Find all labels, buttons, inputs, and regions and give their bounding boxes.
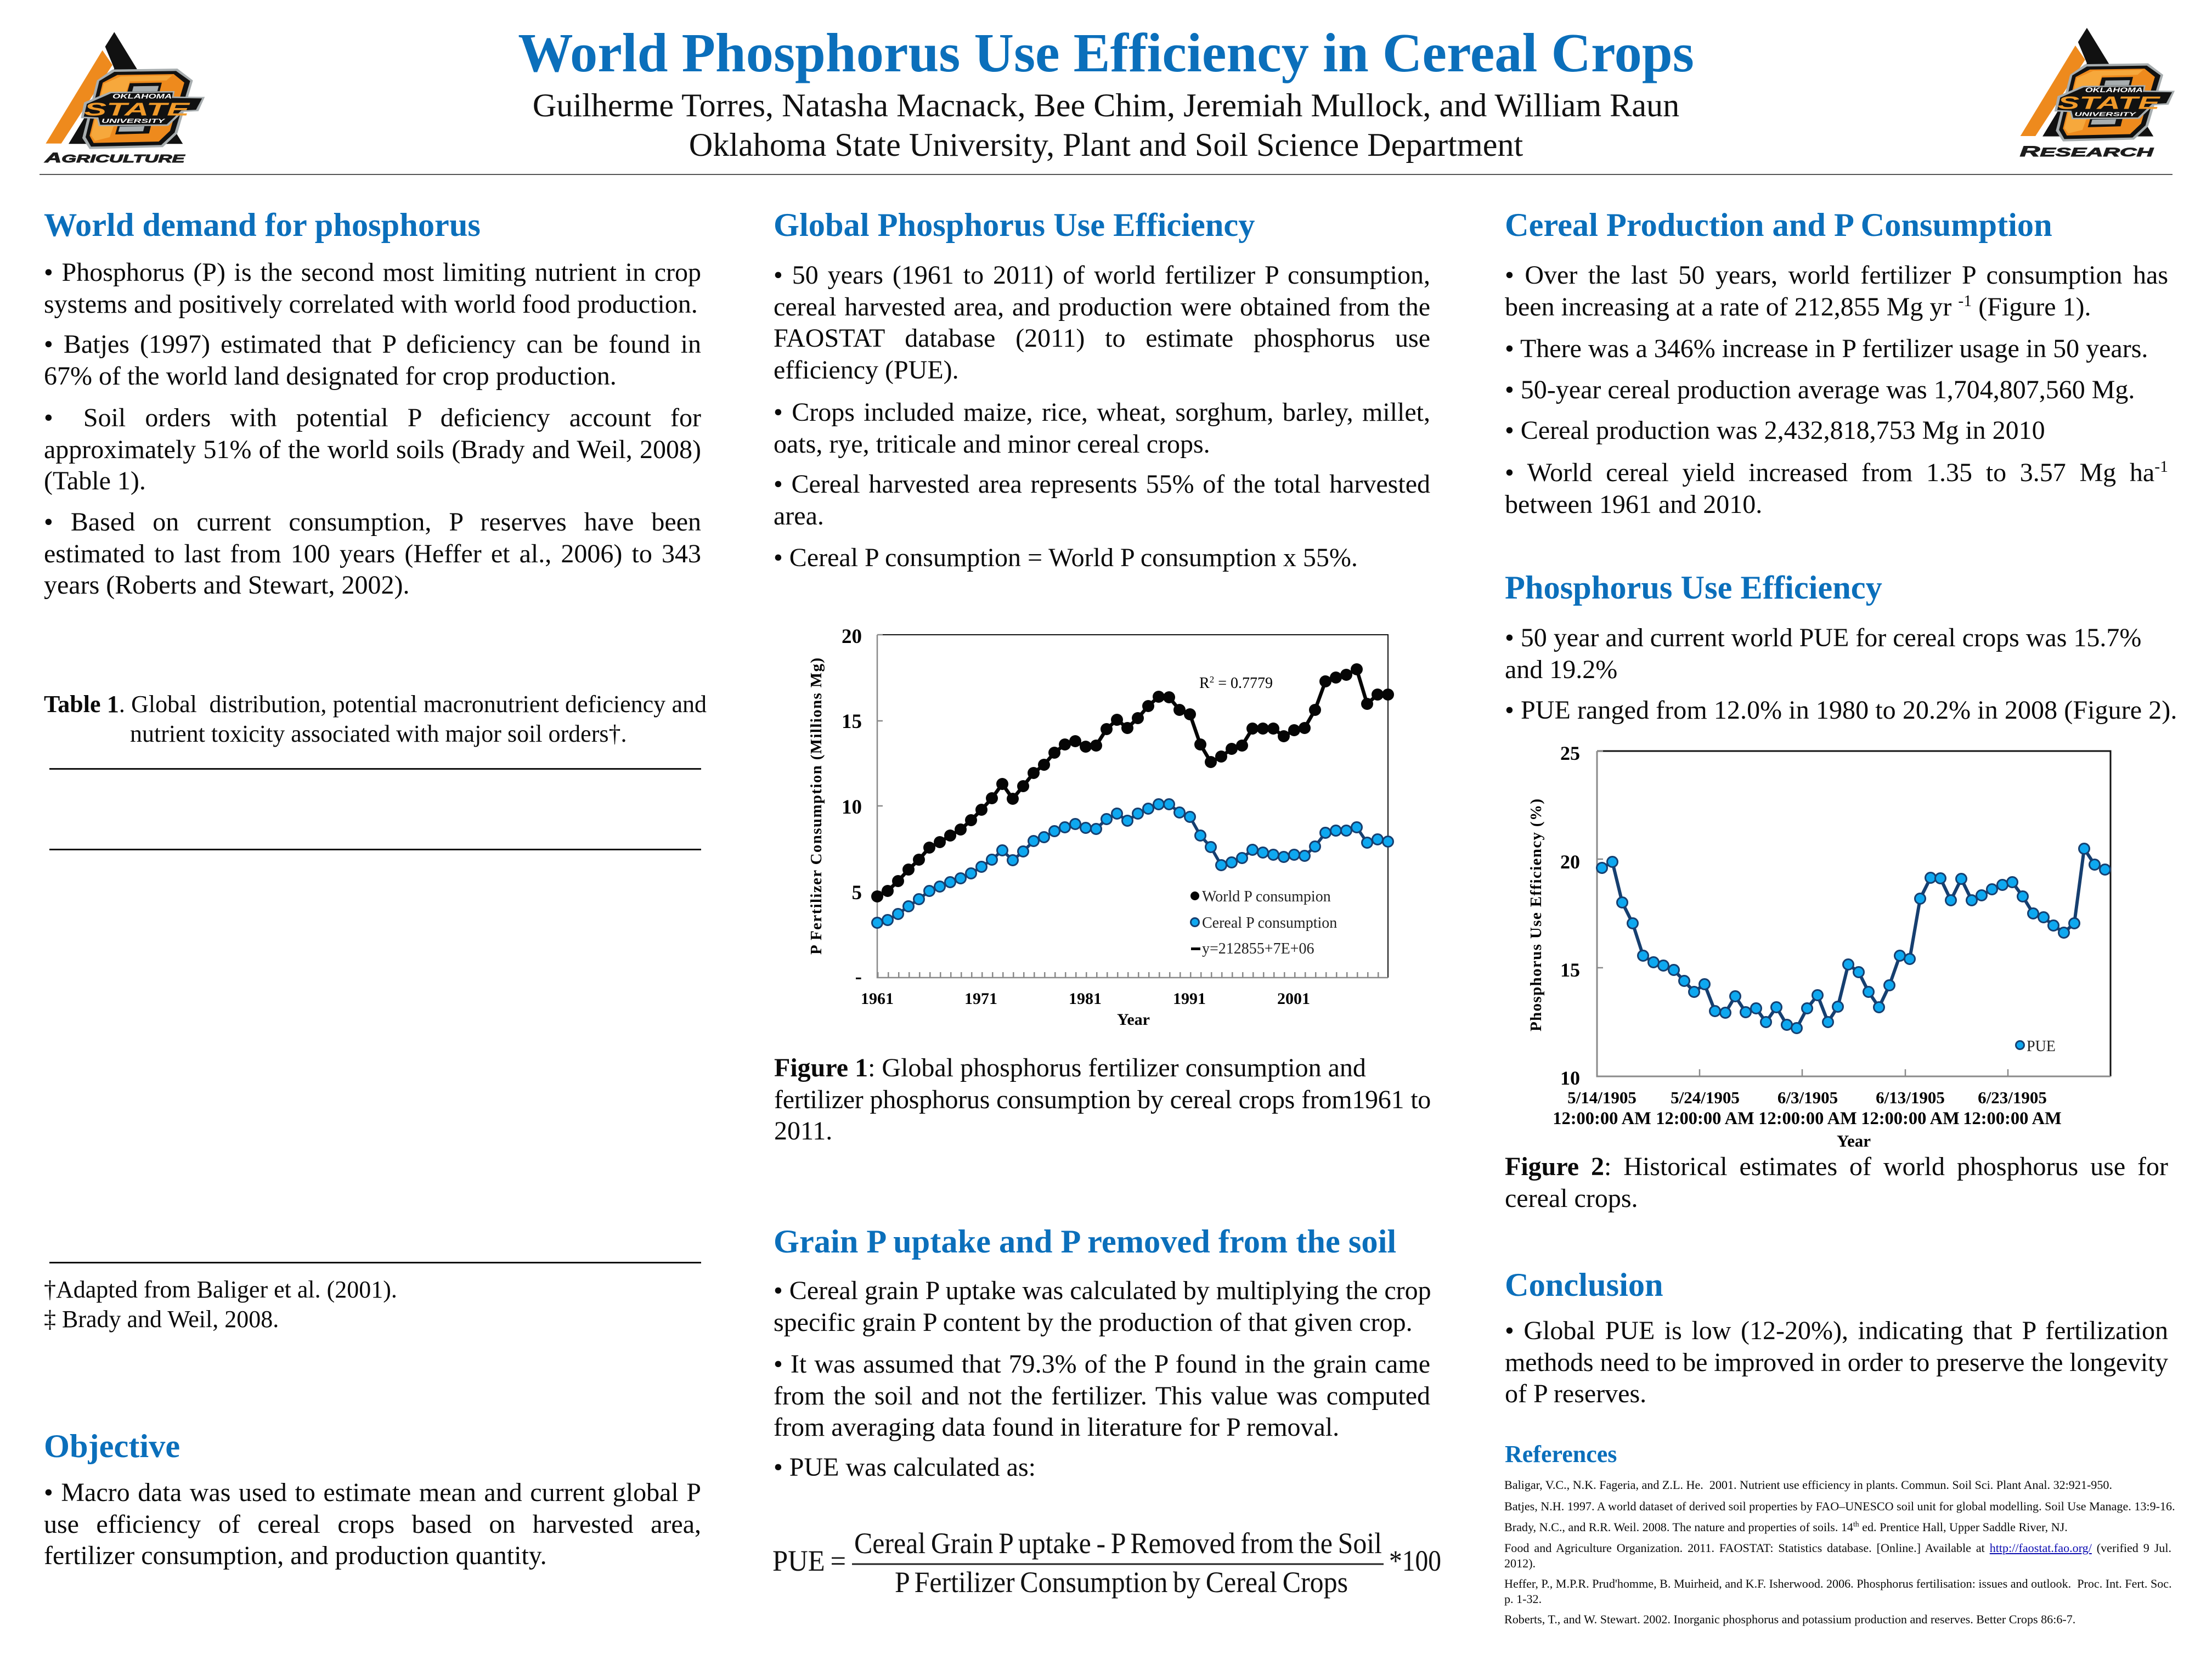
text: global PUE bullet 3 <box>774 470 1430 530</box>
chart legend: y=212855+7E+06 <box>1202 940 1314 957</box>
text: objective: use efficiency of cereal crops based on harvested area, <box>44 1510 701 1538</box>
heading: Cereal Production and P Consumption: Cereal Production and P Consumption <box>1505 207 2052 244</box>
formula: PUE: Cereal Grain P uptake - P Removed from the Soil <box>854 1527 1382 1560</box>
table footnotes: ‡ Brady and Weil, 2008. <box>44 1306 279 1333</box>
formula: PUE: P Fertilizer Consumption by Cereal Crops <box>895 1566 1348 1599</box>
y axis labels: 20 <box>1560 851 1580 873</box>
R squared annotation: = 0.7779 <box>1214 675 1273 692</box>
text: objective <box>44 1478 701 1570</box>
text: world demand bullet 3: (Table 1). <box>44 466 146 495</box>
text: cereal production bullet 4: • Cereal production was 2,432,818,753 Mg in 2010 <box>1505 416 2045 445</box>
table footnotes <box>44 1276 397 1333</box>
text: world demand bullet 1: • Phosphorus (P) is the second most limiting nutrient in crop <box>44 258 701 287</box>
formula: PUE <box>772 1527 1441 1599</box>
x axis labels: 6/13/1905 <box>1876 1088 1945 1107</box>
title: World Phosphorus Use Efficiency in Cereal Crops <box>518 22 1694 83</box>
text: cereal production bullet 5: between 1961 and 2010. <box>1505 489 1762 519</box>
x axis labels: 12:00:00 AM <box>1861 1109 1960 1128</box>
logo: OSU Research: R ESEARCH <box>2020 143 2154 160</box>
logo: OSU Agriculture <box>43 32 205 166</box>
text: reference FAO <box>1504 1541 2171 1571</box>
y axis labels: 10 <box>842 796 862 819</box>
y axis labels: 5 <box>851 882 862 904</box>
y axis title: P Fertilizer Consumption (Millions Mg) <box>808 658 825 955</box>
text: world demand bullet 4: • Based on current consumption, P reserves have been <box>44 507 701 537</box>
heading: Grain P uptake: Grain P uptake and P removed from the soil <box>774 1223 1396 1260</box>
text: world demand bullet 2: • Batjes (1997) estimated that P deficiency can be found in <box>44 330 701 359</box>
text: grain P bullet 2: from the soil and not the fertilizer. This value was computed <box>774 1381 1430 1410</box>
text: reference Roberts: Roberts, T., and W. Stewart. 2002. Inorganic phosphorus and potassium production and reserves. Better Crops 86:6-7. <box>1504 1612 2075 1626</box>
formula: PUE: PUE = <box>772 1544 846 1577</box>
text: objective: fertilizer consumption, and production quantity. <box>44 1541 547 1570</box>
y axis labels: 15 <box>1560 959 1580 981</box>
text: world demand bullet 1: systems and positively correlated with world food production. <box>44 290 698 318</box>
x axis labels <box>1553 1088 2062 1150</box>
text: global PUE bullet 1: FAOSTAT database (2011) to estimate phosphorus use <box>774 324 1430 353</box>
figure 2 caption: Figure 2: Historical estimates of world phosphorus use for <box>1505 1152 2168 1181</box>
text: global PUE bullet 2: • Crops included maize, rice, wheat, sorghum, barley, millet, <box>774 398 1430 427</box>
series: world P consumption <box>877 669 1388 896</box>
x axis labels: Year <box>1117 1011 1150 1029</box>
heading: References: References <box>1505 1441 1617 1468</box>
text: PUE bullet 2: • PUE ranged from 12.0% in 1980 to 20.2% in 2008 (Figure 2). <box>1505 696 2177 725</box>
heading: Global Phosphorus Use Efficiency: Global Phosphorus Use Efficiency <box>774 207 1255 244</box>
text: reference Baligar: Baligar, V.C., N.K. Fageria, and Z.L. He. 2001. Nutrient use efficiency in plants. Commun. Soil Sci. Plant Anal. 32:921-950. <box>1504 1478 2112 1492</box>
text: cereal production bullet 5: • World cereal yield increased from 1.35 to 3.57 Mg ha-1 <box>1505 458 2168 487</box>
table footnotes: †Adapted from Baliger et al. (2001). <box>44 1276 397 1303</box>
text: world demand bullet 1 <box>44 258 701 318</box>
text: grain P bullet 1 <box>774 1276 1431 1336</box>
affiliation: Oklahoma State University, Plant and Soil Science Department <box>689 127 1523 163</box>
figure 2 caption: cereal crops. <box>1505 1184 1638 1212</box>
y axis title: Phosphorus Use Efficiency (%) <box>1527 799 1545 1031</box>
logo: OSU Research: OKLAHOMA <box>2085 87 2143 94</box>
authors: Guilherme Torres, Natasha Macnack, Bee Chim, Jeremiah Mullock, and William Raun <box>533 87 1679 124</box>
x axis labels: 5/14/1905 <box>1567 1088 1637 1107</box>
text: PUE bullet 1: and 19.2% <box>1505 655 1617 684</box>
formula: PUE: *100 <box>1389 1544 1441 1577</box>
text: global PUE bullet 1: cereal harvested area, and production were obtained from the <box>774 292 1430 321</box>
x axis labels: 5/24/1905 <box>1671 1088 1740 1107</box>
chart legend: Cereal P consumption <box>1202 915 1337 932</box>
chart legend <box>1190 888 1337 957</box>
x axis labels: 1971 <box>964 990 997 1008</box>
text: cereal production bullet 5 <box>1505 457 2168 520</box>
figure 1 caption <box>774 1053 1431 1146</box>
y axis labels: 20 <box>842 625 862 648</box>
text: reference FAO: Food and Agriculture Organization. 2011. FAOSTAT: Statistics database. [Online.] Available at http://faostat.fao.org/ (verified 9 Jul. <box>1504 1541 2171 1555</box>
logo: OSU Agriculture: UNIVERSITY <box>101 118 166 125</box>
text: cereal production bullet 2: • There was a 346% increase in P fertilizer usage in 50 years. <box>1505 334 2148 363</box>
logo: OSU Agriculture: STATE <box>84 100 191 120</box>
text: world demand bullet 4: years (Roberts and Stewart, 2002). <box>44 571 409 600</box>
chart: figure 2 phosphorus use efficiency <box>1520 735 2129 1158</box>
text: conclusion: • Global PUE is low (12-20%), indicating that P fertilization <box>1505 1316 2168 1345</box>
series: PUE <box>1602 849 2105 1028</box>
text: global PUE bullet 1: efficiency (PUE). <box>774 356 959 384</box>
text: conclusion: of P reserves. <box>1505 1379 1646 1408</box>
y axis labels: 10 <box>1560 1067 1580 1089</box>
text: world demand bullet 3 <box>44 403 701 495</box>
text: PUE bullet 1 <box>1505 622 2168 685</box>
logo: OSU Research <box>2019 27 2175 160</box>
heading: World demand for phosphorus: World demand for phosphorus <box>44 207 481 244</box>
logo: OSU Agriculture: OKLAHOMA <box>112 92 172 100</box>
y axis labels <box>842 625 862 988</box>
x axis labels <box>861 990 1310 1029</box>
figure 2 caption <box>1505 1151 2168 1214</box>
text: world demand bullet 2 <box>44 330 701 391</box>
heading: Phosphorus Use Efficiency: Phosphorus Use Efficiency <box>1505 569 1882 606</box>
text: world demand bullet 2: 67% of the world land designated for crop production. <box>44 361 617 391</box>
text: reference FAO: 2012). <box>1504 1556 1536 1570</box>
logo: OSU Research: STATE <box>2058 93 2161 113</box>
x axis labels: 1981 <box>1069 990 1102 1008</box>
chart: figure 1 P fertilizer consumption <box>808 625 1394 1029</box>
text: global PUE bullet 4: • Cereal P consumption = World P consumption x 55%. <box>774 543 1358 572</box>
text: reference Heffer: p. 1-32. <box>1504 1592 1542 1606</box>
heading: Objective: Objective <box>44 1428 180 1465</box>
text: grain P bullet 1: • Cereal grain P uptake was calculated by multiplying the crop <box>774 1276 1431 1305</box>
x axis labels: 2001 <box>1277 990 1310 1008</box>
figure 1 caption: Figure 1: Global phosphorus fertilizer consumption and <box>774 1053 1366 1082</box>
text: cereal production bullet 3: • 50-year cereal production average was 1,704,807,560 Mg. <box>1505 375 2135 404</box>
text: grain P bullet 1: specific grain P content by the production of that given crop. <box>774 1308 1413 1336</box>
x axis labels: 12:00:00 AM <box>1758 1109 1857 1128</box>
text: reference Batjes: Batjes, N.H. 1997. A world dataset of derived soil properties by FAO–UNESCO soil unit for global modelling. Soil Use Manage. 13:9-16. <box>1504 1499 2175 1513</box>
series: cereal P consumption <box>877 804 1388 923</box>
table caption: nutrient toxicity associated with major soil orders†. <box>130 720 627 747</box>
text: reference Heffer: Heffer, P., M.P.R. Prud'homme, B. Muirheid, and K.F. Isherwood. 2006. Phosphorus fertilisation: issues and outlook. Proc. Int. Fert. Soc. <box>1504 1577 2172 1590</box>
y axis labels: 25 <box>1560 742 1580 764</box>
text: global PUE bullet 3: area. <box>774 501 824 530</box>
text: grain P bullet 3: • PUE was calculated as: <box>774 1453 1036 1482</box>
y axis labels <box>1560 742 1580 1089</box>
x axis labels: 1961 <box>861 990 894 1008</box>
text: reference Brady: Brady, N.C., and R.R. Weil. 2008. The nature and properties of soils. 14th ed. Prentice Hall, Upper Saddle River, NJ. <box>1504 1520 2068 1534</box>
text: global PUE bullet 1: • 50 years (1961 to 2011) of world fertilizer P consumption, <box>774 261 1430 290</box>
table caption: Table 1. Global distribution, potential macronutrient deficiency and <box>44 691 707 718</box>
text: reference Heffer <box>1504 1576 2171 1607</box>
text: global PUE bullet 1 <box>774 261 1430 384</box>
y axis labels: 15 <box>842 710 862 733</box>
text: objective: • Macro data was used to estimate mean and current global P <box>44 1478 701 1507</box>
text: world demand bullet 3: • Soil orders with potential P deficiency account for <box>44 403 701 432</box>
x axis labels: 12:00:00 AM <box>1963 1109 2062 1128</box>
x axis labels: Year <box>1837 1131 1871 1150</box>
y axis labels: - <box>855 966 862 988</box>
table caption <box>44 691 707 747</box>
text: cereal production bullet 1: been increasing at a rate of 212,855 Mg yr -1 (Figure 1). <box>1505 292 2091 321</box>
text: conclusion <box>1505 1315 2168 1410</box>
R squared annotation: R <box>1199 675 1210 692</box>
x axis labels: 12:00:00 AM <box>1553 1109 1651 1128</box>
figure 1 caption: fertilizer phosphorus consumption by cereal crops from1961 to <box>774 1085 1431 1114</box>
text: global PUE bullet 2 <box>774 398 1430 459</box>
chart legend: PUE <box>2027 1038 2056 1055</box>
x axis labels: 6/23/1905 <box>1978 1088 2047 1107</box>
text: cereal production bullet 1: • Over the last 50 years, world fertilizer P consumption has <box>1505 261 2168 290</box>
text: grain P bullet 2: from averaging data found in literature for P removal. <box>774 1413 1339 1442</box>
figure 1 caption: 2011. <box>774 1116 832 1146</box>
heading: Conclusion: Conclusion <box>1505 1267 1663 1304</box>
text: global PUE bullet 3: • Cereal harvested area represents 55% of the total harvested <box>774 470 1430 499</box>
text: grain P bullet 2 <box>774 1350 1430 1442</box>
x axis labels: 6/3/1905 <box>1778 1088 1838 1107</box>
text: world demand bullet 4 <box>44 507 701 600</box>
text: PUE bullet 1: • 50 year and current world PUE for cereal crops was 15.7% <box>1505 623 2141 652</box>
text: grain P bullet 2: • It was assumed that 79.3% of the P found in the grain came <box>774 1350 1430 1379</box>
text: global PUE bullet 2: oats, rye, triticale and minor cereal crops. <box>774 429 1210 459</box>
logo: OSU Agriculture: AGRICULTURE <box>44 150 186 166</box>
chart legend: World P consumpion <box>1202 888 1331 905</box>
text: conclusion: methods need to be improved in order to preserve the longevity <box>1505 1347 2168 1377</box>
text: cereal production bullet 1 <box>1505 261 2168 321</box>
x axis labels: 12:00:00 AM <box>1656 1109 1754 1128</box>
text: world demand bullet 3: approximately 51% of the world soils (Brady and Weil, 2008) <box>44 435 701 464</box>
x axis labels: 1991 <box>1173 990 1206 1008</box>
R squared annotation: 2 <box>1210 674 1214 685</box>
logo: OSU Research: UNIVERSITY <box>2074 111 2137 117</box>
text: world demand bullet 4: estimated to last from 100 years (Heffer et al., 2006) to 343 <box>44 539 701 568</box>
